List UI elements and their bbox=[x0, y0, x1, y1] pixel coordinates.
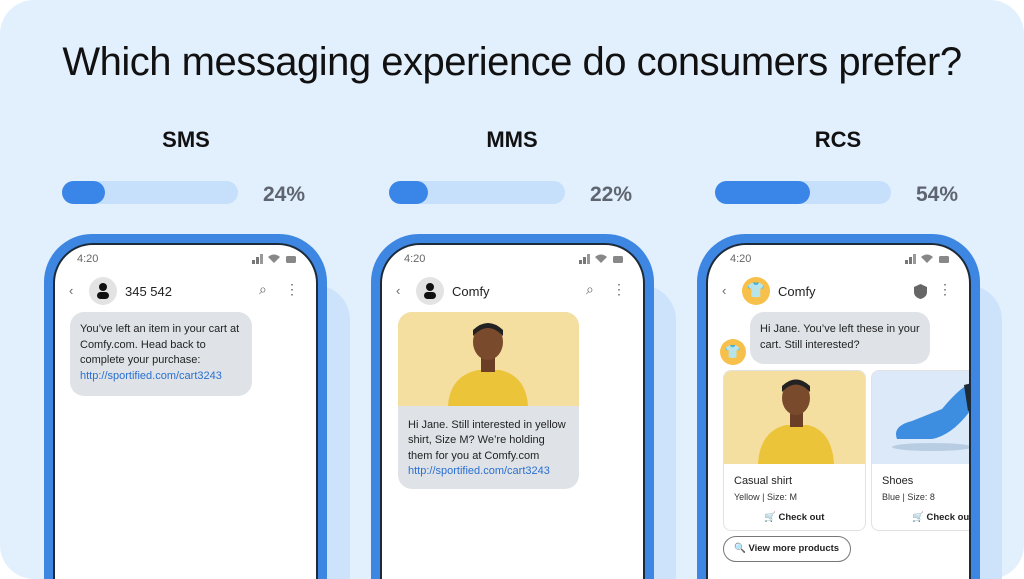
mms message with image: http://sportified.com/cart3243 bbox=[408, 465, 550, 477]
bar: SMS 24% bbox=[62, 181, 238, 204]
phone: SMS: ⌕ bbox=[259, 281, 267, 297]
card: casual shirt: Casual shirt bbox=[734, 475, 792, 487]
pct: RCS: 54% bbox=[916, 183, 958, 206]
label: MMS: MMS bbox=[486, 127, 538, 152]
mms message with image bbox=[398, 312, 579, 489]
phone: MMS: ⋮ bbox=[612, 281, 626, 297]
bar: MMS 22% bbox=[389, 181, 565, 204]
title: Which messaging experience do consumers prefer? bbox=[62, 40, 962, 84]
button: view more products: 🔍 View more products bbox=[734, 543, 839, 554]
phone: SMS bbox=[44, 234, 327, 579]
rcs message bubble bbox=[750, 312, 930, 364]
bar: RCS 54% bbox=[715, 181, 891, 204]
phone: RCS: 👕 bbox=[747, 282, 765, 299]
card: casual shirt: 🛒 Check out bbox=[764, 512, 824, 523]
pct: MMS: 22% bbox=[590, 183, 632, 206]
phone: MMS: ⌕ bbox=[586, 281, 594, 297]
card: shoes: Blue | Size: 8 bbox=[882, 492, 935, 502]
label: SMS: SMS bbox=[162, 127, 210, 152]
card: shoes bbox=[871, 370, 991, 531]
rcs message bubble: Hi Jane. You’ve left these in your cart. Still interested? bbox=[760, 323, 920, 350]
phone: MMS: Comfy bbox=[452, 284, 490, 299]
phone: SMS: You’ve left an item in your cart at Comfy.com. Head back to complete your purchase: bbox=[80, 323, 239, 366]
card: casual shirt bbox=[723, 370, 866, 531]
phone: SMS: ‹ bbox=[69, 283, 73, 298]
pct: SMS: 24% bbox=[263, 183, 305, 206]
label: RCS: RCS bbox=[815, 127, 861, 152]
card: shoes: Shoes bbox=[882, 475, 913, 487]
phone: MMS: ‹ bbox=[396, 283, 400, 298]
phone: RCS: ‹ bbox=[722, 283, 726, 298]
card: casual shirt: Yellow | Size: M bbox=[734, 492, 797, 502]
phone: SMS: http://sportified.com/cart3243 bbox=[80, 370, 222, 382]
mms message with image: Hi Jane. Still interested in yellow shirt, Size M? We’re holding them for you at Comfy.com bbox=[408, 418, 566, 462]
phone: MMS: 4:20 bbox=[404, 253, 425, 265]
phone: SMS: 4:20 bbox=[77, 253, 98, 265]
phone: RCS: Comfy bbox=[778, 284, 816, 299]
card: shoes: 🛒 Check out bbox=[912, 512, 971, 523]
phone: RCS: 👕 bbox=[725, 344, 741, 359]
phone: SMS: ⋮ bbox=[285, 281, 299, 297]
phone: RCS bbox=[697, 234, 980, 579]
phone: SMS: 345 542 bbox=[125, 284, 172, 299]
button: view more products bbox=[723, 536, 851, 562]
phone: RCS: ⋮ bbox=[938, 281, 952, 297]
phone: RCS: 4:20 bbox=[730, 253, 751, 265]
phone: MMS bbox=[371, 234, 654, 579]
